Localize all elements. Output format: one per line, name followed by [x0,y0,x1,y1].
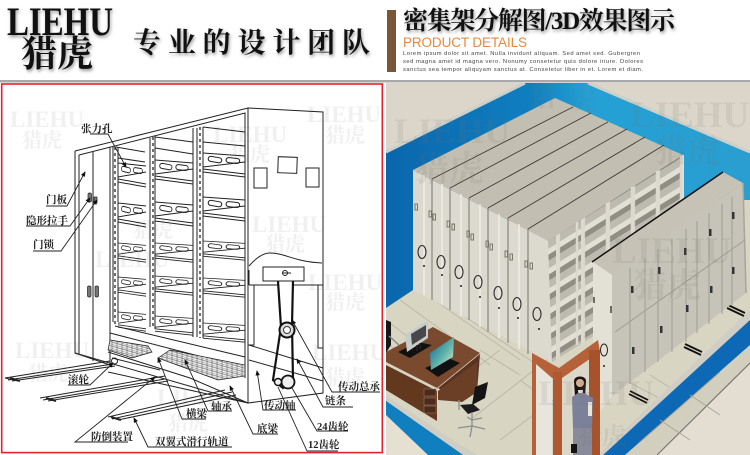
part labels: 传动总承 [338,380,380,393]
text block: lorem ipsum: Lorem ipsum dolor sit amet. Nulla invidunt aliquam. Sed amet sed. Gubergren [403,51,640,57]
monitor back [398,320,432,358]
part labels: 门锁 [33,238,54,251]
watermarks: left panel: 猎虎 [325,366,365,389]
shelves with tension slots [118,153,245,342]
office chair [458,382,488,437]
watermarks: left panel: LIEHU [10,107,85,132]
part labels: 传动轴 [264,399,296,412]
watermarks: left panel: LIEHU [308,270,383,295]
part labels: 张力孔 [81,122,113,135]
watermarks: right panel: LIEHU [630,95,749,136]
watermarks: left panel: LIEHU [312,340,387,365]
watermarks: right panel [394,81,749,450]
text block: lorem ipsum [403,51,643,73]
watermarks: left panel: 猎虎 [265,233,305,256]
watermarks: left panel: 猎虎 [28,362,68,385]
left desk chair [386,320,399,353]
watermarks: left panel: LIEHU [213,122,288,147]
cabinet frame [75,108,323,403]
tiled floor [386,200,750,455]
watermarks: right panel: 猎虎 [414,150,484,189]
panel: 3D rendering [386,81,750,455]
woman figure [571,376,593,455]
part labels: 底梁 [257,422,279,435]
monitor front [425,337,460,377]
watermarks: left panel: LIEHU [307,102,382,127]
transmission assembly [248,267,323,388]
part labels: 隐形拉手 [26,214,68,227]
part labels: 横梁 [186,407,208,420]
watermarks: left panel: LIEHU [95,247,170,272]
office desk [386,327,480,421]
logo: LIEHU 猎虎 [7,0,113,74]
watermarks: right panel: 猎虎 [654,133,720,170]
watermarks: left panel: 猎虎 [325,291,365,314]
logo: LIEHU 猎虎: 猎虎 [21,34,93,74]
part labels [26,122,380,451]
text block: lorem ipsum: sanctus sea tempor aliquyam sanctus at. Consetetur liber in et. Lorem et diam. [403,67,643,73]
heading: design team: 专业的设计团队 [133,26,370,59]
part labels: 门板 [46,193,67,206]
front blue strip [386,396,476,455]
brown accent bar [387,10,396,72]
watermarks: right panel: LIEHU [538,373,654,413]
part labels: 防倒装置 [91,430,133,443]
wooden gate frame [532,340,600,455]
watermarks: left panel [10,102,387,435]
part labels: 12齿轮 [308,438,340,451]
watermarks: left panel: 猎虎 [133,219,173,242]
watermarks: left panel: 猎虎 [168,412,208,435]
divider line [0,80,750,82]
watermarks: left panel: 猎虎 [230,143,270,166]
watermarks: right panel: 猎 [528,81,556,113]
part labels: 双翼式滑行轨道 [155,435,229,448]
subheading: product details: PRODUCT DETAILS [403,35,527,50]
side panel windows [249,157,322,266]
part labels: 链条 [325,394,346,407]
blue floor band [386,83,750,455]
latches and handwheels [415,204,541,330]
watermarks: right panel: LIEHU [612,231,731,272]
watermarks: left panel: 猎虎 [22,129,62,152]
watermarks: right panel: LIEHU [394,111,510,151]
part labels: 轴承 [211,400,232,413]
watermarks: left panel: LIEHU [157,385,232,410]
rail markers [628,305,746,404]
logo: LIEHU 猎虎: LIEHU [7,0,113,44]
part labels: 24齿轮 [317,420,349,433]
rails [5,358,236,420]
watermarks: left panel: LIEHU [15,338,90,363]
mobile shelf units [413,98,683,362]
part labels: 滚轮 [68,373,89,386]
leader lines [26,134,380,451]
floor beam lattice [108,340,248,403]
watermarks: left panel: 猎虎 [325,124,365,147]
door handles [88,193,98,297]
watermarks: right panel: 虎 [570,86,596,115]
watermarks: right panel: 猎虎 [633,267,701,305]
panel: exploded diagram [2,84,387,453]
watermarks: left panel: LIEHU [252,212,327,237]
text block: lorem ipsum: sed magna amet id magna vero. Nonumy consetetur quis dolore iriure. Dolores [403,59,643,65]
heading: exploded view title: 密集架分解图/3D效果图示 [403,6,677,35]
front shelf unit [592,172,746,420]
watermarks: right panel: 猎虎 [578,423,626,450]
